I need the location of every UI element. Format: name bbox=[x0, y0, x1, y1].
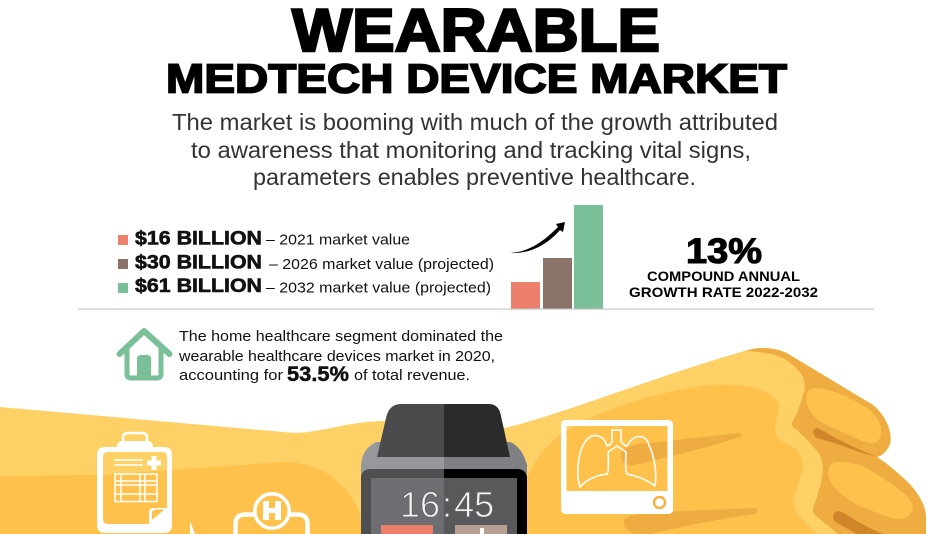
home healthcare text block: of total revenue. bbox=[354, 367, 470, 384]
home healthcare text block bbox=[178, 328, 503, 386]
crease two bbox=[833, 511, 883, 534]
bar chart bbox=[511, 205, 603, 309]
title bbox=[166, 0, 787, 102]
arm outer light shape bbox=[0, 348, 926, 534]
legend row 2026 bbox=[118, 252, 494, 274]
watch case bbox=[361, 442, 527, 534]
wrinkle upper bbox=[621, 433, 742, 465]
home healthcare text block: The home healthcare segment dominated the bbox=[179, 328, 503, 345]
home healthcare text block: accounting for bbox=[179, 367, 283, 384]
legend row 2032: $61 BILLION bbox=[135, 276, 262, 297]
watch time: 16:45 bbox=[400, 484, 494, 525]
title: MEDTECH DEVICE MARKET bbox=[166, 56, 787, 102]
crease one bbox=[813, 428, 877, 457]
watch tile red bbox=[381, 525, 433, 534]
subtitle text block bbox=[172, 109, 778, 190]
icon: growth arrow bbox=[510, 222, 565, 253]
legend row 2021 bbox=[118, 228, 410, 250]
watch tile tan bbox=[455, 525, 507, 534]
CAGR callout: GROWTH RATE 2022-2032 bbox=[629, 284, 818, 300]
icon: hospital bbox=[236, 494, 308, 534]
legend: market values bbox=[118, 228, 494, 297]
finger two bbox=[828, 462, 913, 519]
icon: lungs monitor bbox=[561, 420, 673, 514]
palm mid tone bbox=[527, 385, 817, 534]
CAGR callout: COMPOUND ANNUAL bbox=[647, 268, 800, 284]
forearm mid tone bbox=[0, 462, 362, 534]
illustration: arm bbox=[0, 348, 926, 534]
legend row 2032: – 2032 market value (projected) bbox=[266, 280, 491, 296]
home healthcare text block: 53.5% bbox=[287, 363, 349, 386]
subtitle text block: to awareness that monitoring and tracking vital signs, bbox=[191, 137, 751, 163]
finger one bbox=[806, 388, 881, 443]
home healthcare text block: wearable healthcare devices market in 2020, bbox=[178, 348, 495, 365]
icon: clipboard bbox=[97, 433, 195, 534]
wrinkle lower bbox=[624, 508, 758, 534]
icon: house bbox=[120, 331, 170, 378]
legend row 2026: $30 BILLION bbox=[135, 252, 262, 274]
icon: smartwatch bbox=[361, 404, 527, 534]
CAGR callout: 13% bbox=[686, 232, 762, 271]
legend row 2026: – 2026 market value (projected) bbox=[269, 256, 494, 273]
CAGR callout bbox=[629, 232, 818, 300]
legend row 2032 bbox=[118, 276, 491, 297]
subtitle text block: parameters enables preventive healthcare. bbox=[253, 164, 696, 190]
watch screen bbox=[371, 478, 444, 534]
legend row 2021: – 2021 market value bbox=[266, 232, 410, 248]
subtitle text block: The market is booming with much of the growth attributed bbox=[172, 109, 778, 135]
finger shadow bbox=[745, 348, 926, 534]
legend row 2021: $16 BILLION bbox=[135, 228, 262, 250]
watch strap bbox=[377, 404, 444, 457]
watch bezel bbox=[361, 469, 444, 534]
